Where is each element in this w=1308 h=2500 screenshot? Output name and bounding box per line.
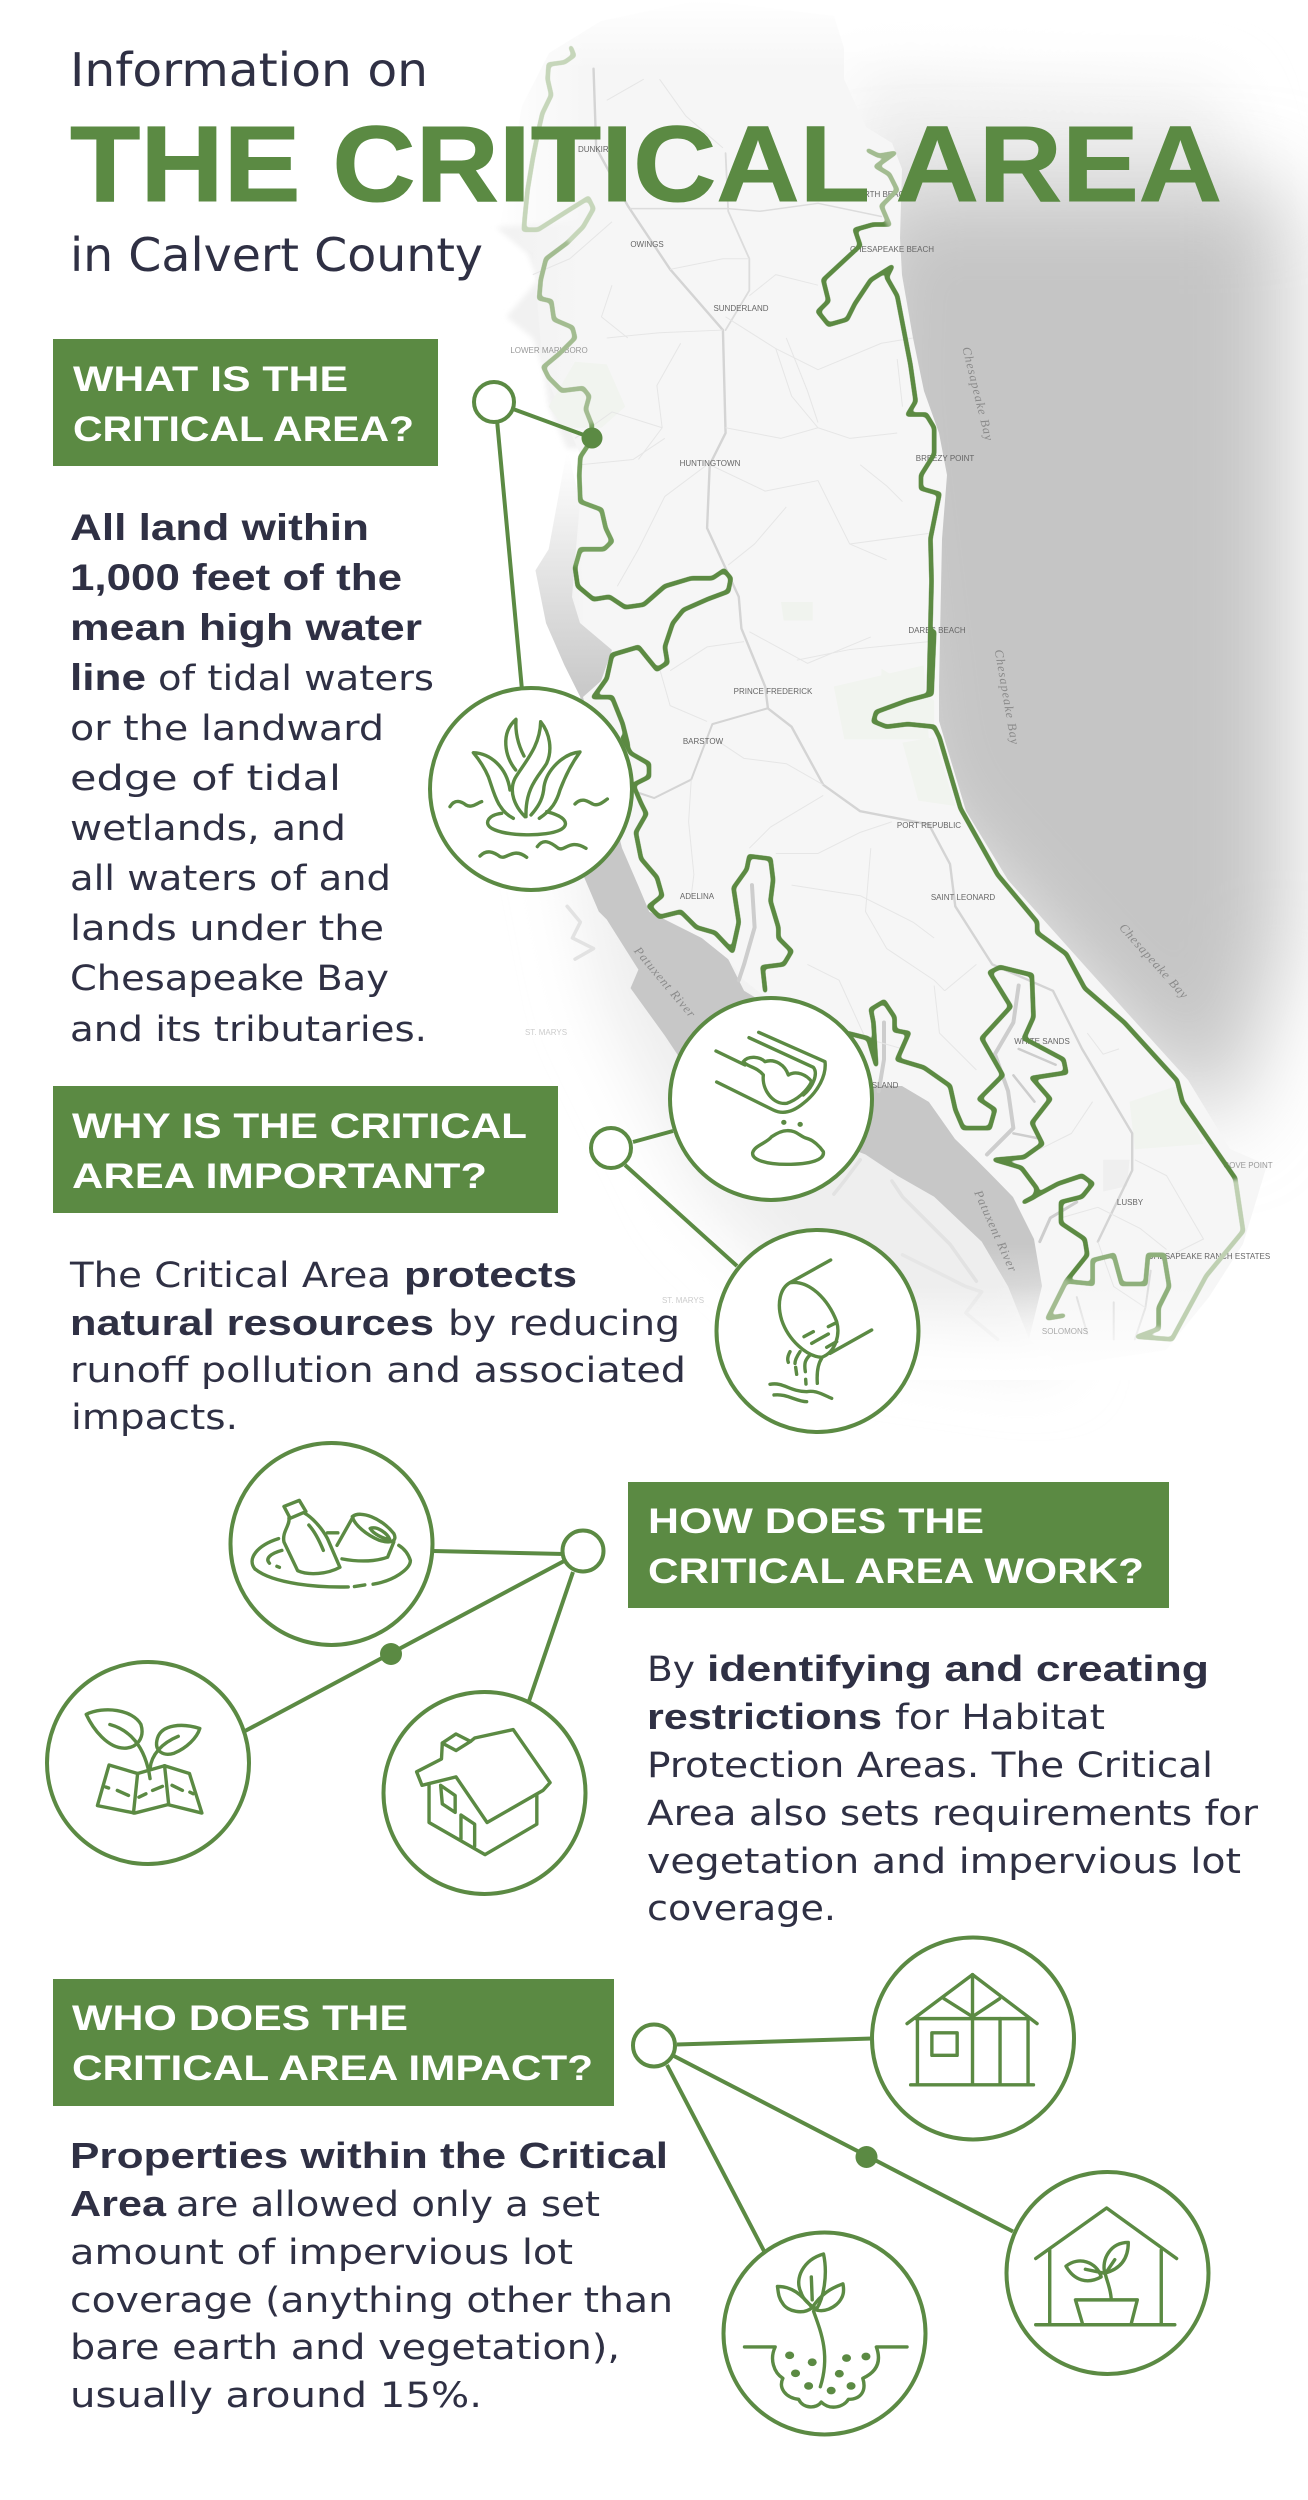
text block: who does the critical area impact: bare earth and vegetation), [70, 2328, 620, 2368]
map of Calvert County: NORTH BEACH [852, 190, 910, 199]
map of Calvert County: LUSBY [1117, 1198, 1144, 1207]
icon: seagrass [430, 688, 632, 890]
map of Calvert County: OWINGS [630, 240, 664, 249]
text block: how does the critical area work: vegetation and impervious lot [647, 1842, 1241, 1882]
map of Calvert County: SAINT LEONARD [931, 893, 995, 902]
panel: who does the critical area impact heading: CRITICAL AREA IMPACT? [72, 2049, 593, 2088]
text block: how does the critical area work: identifying and creating [707, 1648, 1209, 1689]
icon: potted plant in house [1006, 2172, 1208, 2374]
map of Calvert County: SOLOMONS [1042, 1327, 1088, 1336]
text block: how does the critical area work: Protection Areas. The Critical [647, 1746, 1213, 1786]
map of Calvert County: ADELINA [680, 892, 715, 901]
map of Calvert County: COVE POINT [1223, 1161, 1273, 1170]
panel: why is the critical area important heading: AREA IMPORTANT? [72, 1157, 487, 1196]
map of Calvert County: Patuxent River [631, 943, 699, 1021]
text block: why is the critical area important [69, 1254, 686, 1438]
map of Calvert County: HUNTINGTOWN [680, 459, 741, 468]
connector: runoff icons [591, 1128, 737, 1266]
map of Calvert County: ST. MARYS [525, 1028, 567, 1037]
map of Calvert County: DUNKIRK [578, 145, 615, 154]
map of Calvert County: Chesapeake Bay [1116, 921, 1192, 1002]
map of Calvert County: CHESAPEAKE BEACH [850, 245, 934, 254]
text block: what is the critical area: line [70, 657, 146, 698]
text block: what is the critical area: All land within [70, 507, 369, 548]
text block: how does the critical area work: By [647, 1650, 695, 1690]
title: in Calvert County [70, 228, 483, 282]
panel: who does the critical area impact heading: WHO DOES THE [72, 1999, 408, 2038]
text block: what is the critical area: Chesapeake Bay [70, 959, 389, 999]
panel: what is the critical area heading: WHAT IS THE [73, 360, 348, 399]
text block: what is the critical area [70, 507, 434, 1050]
map of Calvert County: ST. MARYS [662, 1296, 704, 1305]
map of Calvert County: CHESAPEAKE RANCH ESTATES [1148, 1252, 1270, 1261]
map of Calvert County: WHITE SANDS [1014, 1037, 1070, 1046]
panel: what is the critical area heading: CRITICAL AREA? [73, 410, 414, 449]
icon: sprout growing from map [47, 1662, 249, 1864]
connector: map pin to seagrass icon [474, 382, 602, 690]
map of Calvert County: Chesapeake Bay [992, 648, 1022, 746]
text block: what is the critical area: 1,000 feet of the [70, 557, 402, 598]
map of Calvert County: Chesapeake Bay [959, 345, 996, 443]
text block: who does the critical area impact: coverage (anything other than [70, 2281, 673, 2321]
icon: soil pouring from chute [670, 998, 872, 1200]
text block: what is the critical area: lands under the [70, 909, 384, 949]
critical area boundary line [524, 48, 1243, 1339]
connector: who is impacted icons [633, 2024, 1013, 2251]
text block: how does the critical area work: coverage. [647, 1889, 836, 1929]
map of Calvert County: LOWER MARLBORO [510, 346, 588, 355]
icon: greenhouse frame [872, 1938, 1074, 2140]
text block: what is the critical area: and its tributaries. [70, 1010, 427, 1050]
text block: why is the critical area important: runoff pollution and associated [70, 1351, 686, 1391]
map of Calvert County: BARSTOW [683, 737, 724, 746]
text block: how does the critical area work: for Habitat [895, 1698, 1105, 1738]
title: THE CRITICAL AREA [70, 103, 1222, 224]
text block: who does the critical area impact: are allowed only a set [176, 2185, 600, 2225]
panel: how does the critical area work heading [628, 1482, 1169, 1608]
panel: what is the critical area heading [53, 339, 438, 466]
panel: why is the critical area important heading: WHY IS THE CRITICAL [72, 1107, 527, 1146]
panel: why is the critical area important heading [53, 1086, 558, 1213]
text block: who does the critical area impact: amount of impervious lot [70, 2233, 573, 2273]
icon: house [384, 1692, 586, 1894]
text block: why is the critical area important: The Critical Area [69, 1256, 391, 1296]
map of Calvert County: DARES BEACH [908, 626, 966, 635]
map of Calvert County: ISLAND [870, 1081, 899, 1090]
text block: who does the critical area impact: Area [70, 2183, 167, 2224]
text block: why is the critical area important: natural resources [70, 1302, 434, 1343]
panel: how does the critical area work heading: CRITICAL AREA WORK? [648, 1552, 1144, 1591]
text block: who does the critical area impact [70, 2135, 673, 2416]
text block: what is the critical area: wetlands, and [70, 809, 346, 849]
panel: how does the critical area work heading: HOW DOES THE [648, 1502, 984, 1541]
text block: why is the critical area important: protects [404, 1254, 577, 1295]
panel: who does the critical area impact heading [53, 1979, 614, 2106]
text block: why is the critical area important: by reducing [448, 1304, 680, 1344]
text block: who does the critical area impact: usually around 15%. [70, 2376, 482, 2416]
icon: plant with roots in soil [724, 2232, 926, 2434]
map of Calvert County: Patuxent River [971, 1187, 1020, 1275]
map of Calvert County: PORT REPUBLIC [897, 821, 961, 830]
text block: what is the critical area: edge of tidal [70, 759, 341, 799]
map of Calvert County: PRINCE FREDERICK [734, 687, 813, 696]
icon: litter bottle and cup [230, 1443, 432, 1645]
icon: liquid pouring from pipe [716, 1230, 918, 1432]
title [70, 43, 1222, 282]
text block: how does the critical area work: Area also sets requirements for [647, 1794, 1259, 1834]
text block: how does the critical area work [647, 1648, 1259, 1929]
map of Calvert County: BREEZY POINT [916, 454, 974, 463]
map of Calvert County: SUNDERLAND [713, 304, 769, 313]
text block: who does the critical area impact: Properties within the Critical [70, 2135, 668, 2176]
title: Information on [70, 43, 428, 97]
text block: what is the critical area: or the landward [70, 709, 384, 749]
text block: how does the critical area work: restrictions [647, 1696, 882, 1737]
connector: how does it work icons [245, 1530, 604, 1731]
text block: what is the critical area: mean high water [70, 607, 422, 648]
text block: why is the critical area important: impacts. [71, 1398, 238, 1438]
text block: what is the critical area: of tidal waters [158, 659, 434, 699]
text block: what is the critical area: all waters of and [70, 859, 391, 899]
